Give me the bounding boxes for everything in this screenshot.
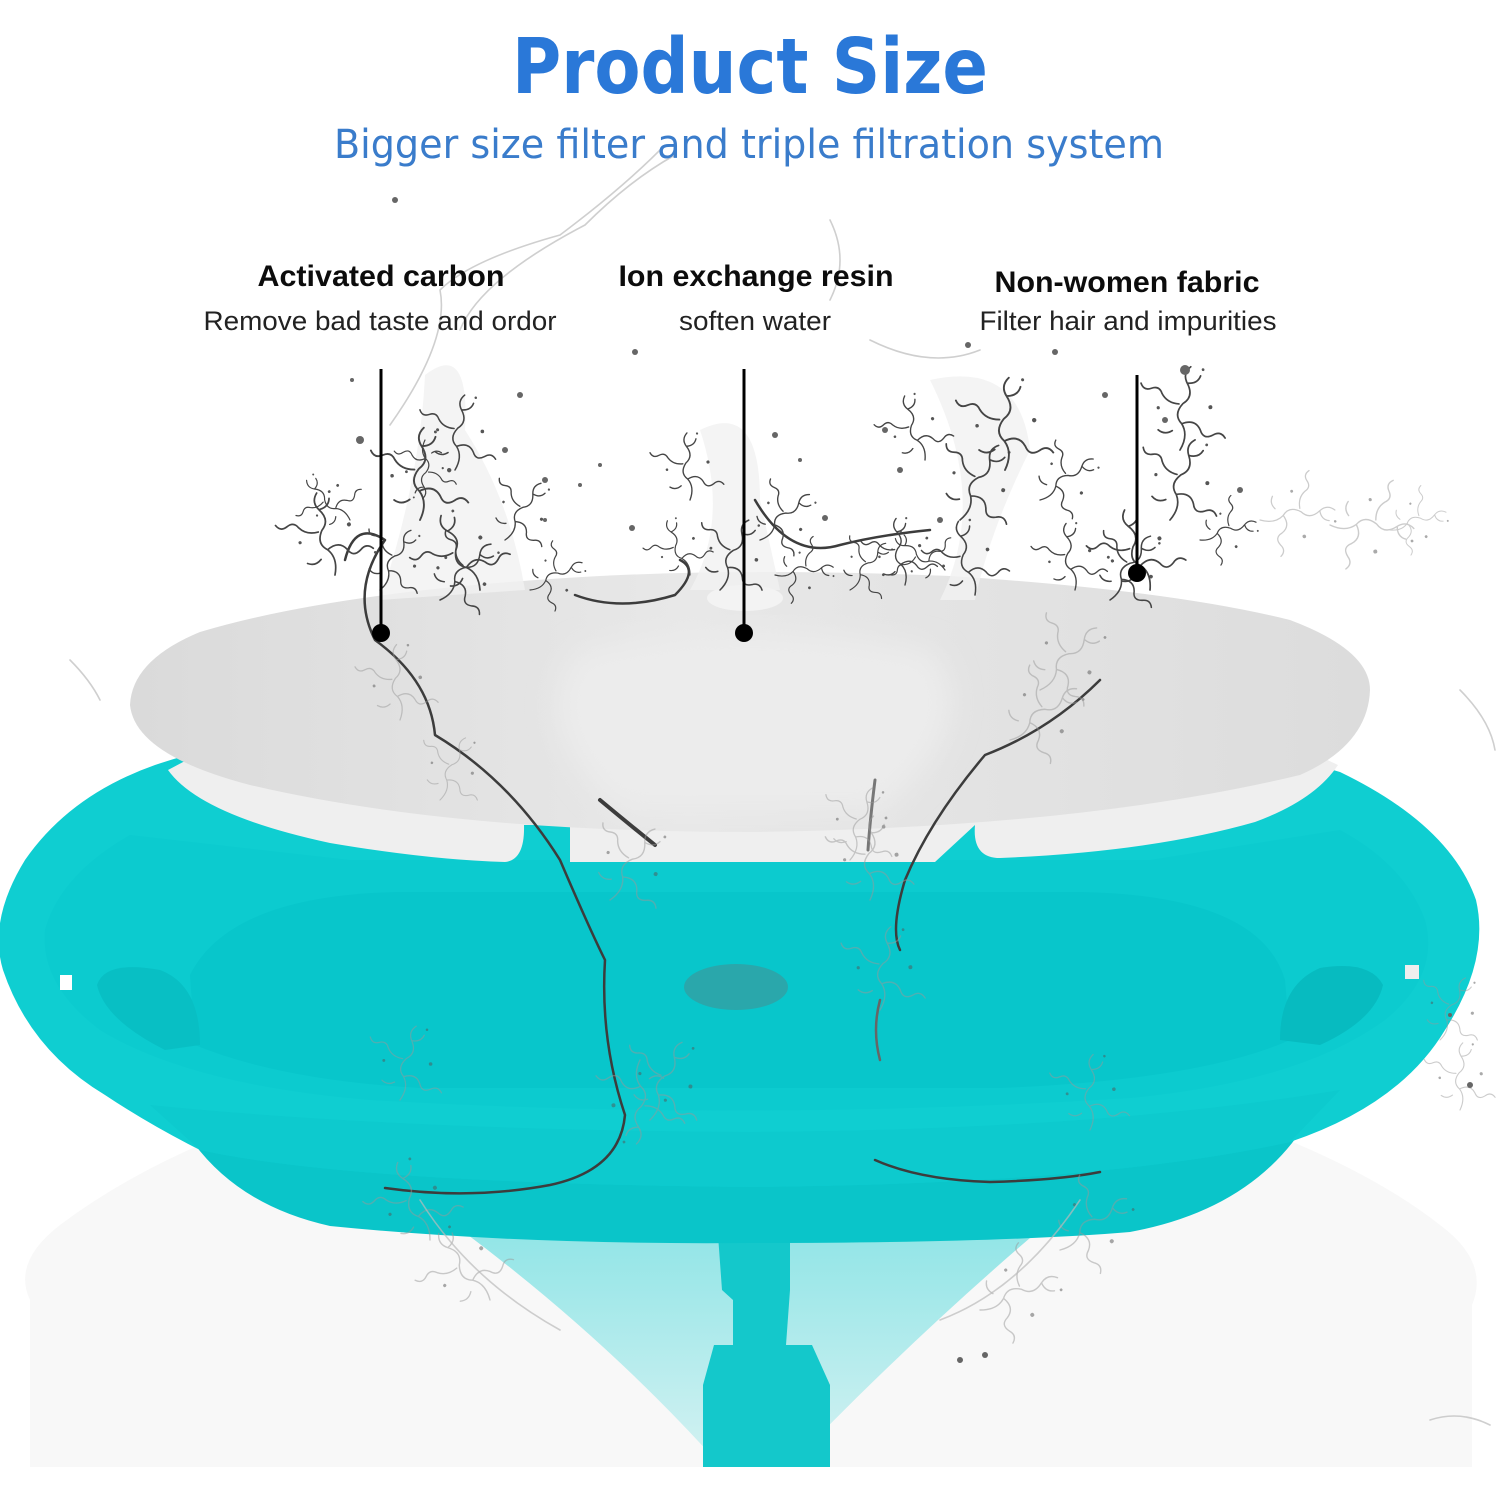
callout: non-women fabric [980,266,1276,582]
rim slots [60,975,72,990]
filter top surface [130,572,1370,832]
ghost reservoir base [25,1125,1477,1467]
title: Product Size [512,23,988,112]
tray outer rim [0,700,1479,1187]
tray pockets [97,967,200,1050]
subtitle: Bigger size filter and triple filtration system [334,122,1164,168]
faint splash columns [380,365,1030,600]
filter centre hole [707,585,783,611]
light teal water cone [420,1200,1075,1465]
filter lower tabs [168,700,1338,862]
tray inner wall [45,830,1428,1111]
callout: ion exchange resin: soften water [679,306,831,336]
tray lower body [188,1125,1305,1243]
tray floor [190,892,1290,1088]
callout: activated carbon: Activated carbon [258,260,504,293]
callout: activated carbon [204,260,556,642]
callout: ion exchange resin [618,260,894,642]
pale spray [352,467,1496,1348]
dark splash squiggles [270,364,1266,621]
pump stem and base [703,1235,830,1467]
callout: non-women fabric: Filter hair and impurities [980,306,1276,336]
filter pad [130,572,1370,862]
tray front band shadow [150,1090,1340,1187]
callout: ion exchange resin: Ion exchange resin [618,260,894,293]
callout: activated carbon: Remove bad taste and ordor [204,306,556,336]
water droplets [350,197,1473,1363]
callout: non-women fabric: Non-women fabric [994,266,1260,299]
drain hole [684,964,788,1010]
teal tray [0,700,1479,1243]
